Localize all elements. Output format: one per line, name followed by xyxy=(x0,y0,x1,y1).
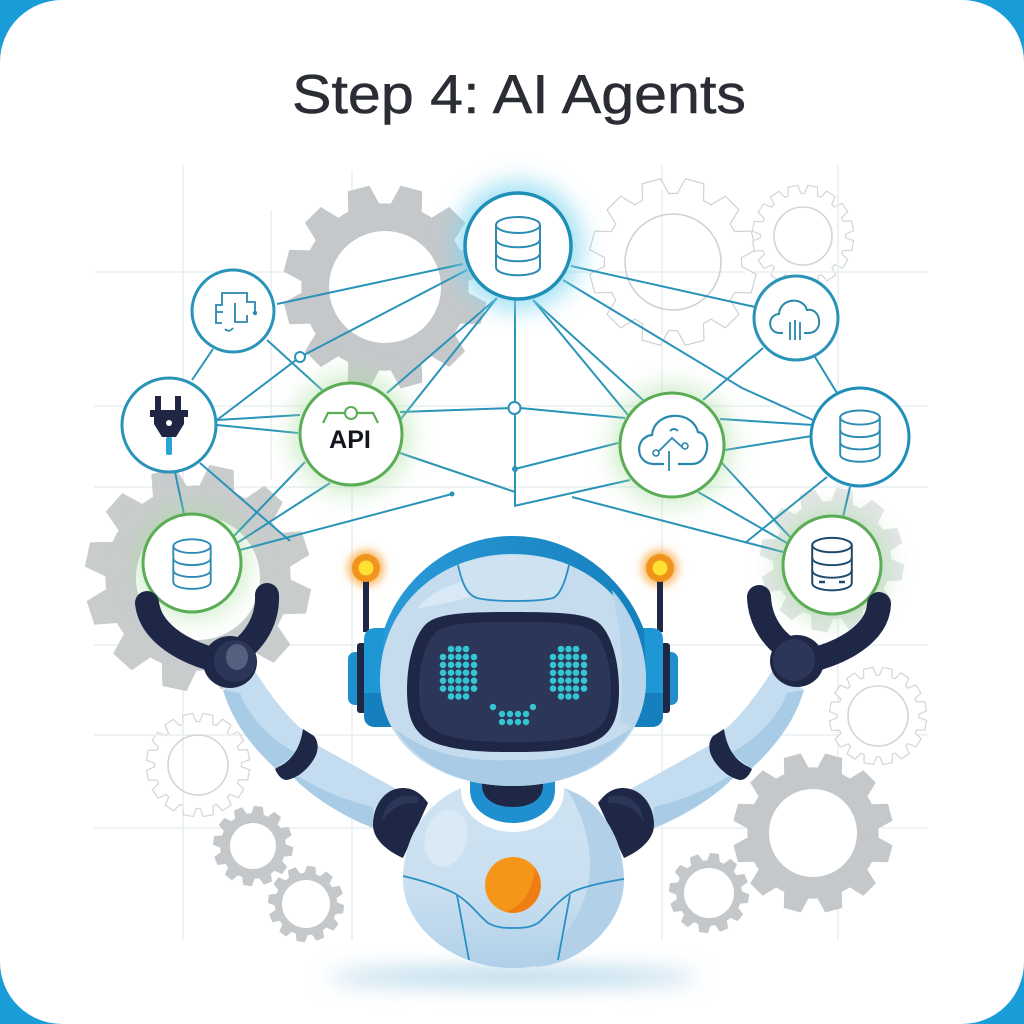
gear: outline top right large xyxy=(571,160,775,364)
network junctions xyxy=(295,352,520,496)
gear: outline right xyxy=(822,660,934,772)
left eye xyxy=(443,649,474,697)
body shading xyxy=(535,789,624,967)
node: plug icon xyxy=(122,378,216,472)
antennas xyxy=(349,551,677,632)
ground shadow xyxy=(328,969,698,985)
gear: outline top right small xyxy=(744,177,862,295)
head dome xyxy=(380,536,646,680)
node: right database green xyxy=(783,516,881,614)
body highlight xyxy=(419,805,473,871)
right arm xyxy=(629,668,804,828)
robot xyxy=(147,536,879,985)
chest light xyxy=(485,857,541,913)
right hand xyxy=(759,597,879,687)
gear: small grey left lower xyxy=(263,861,349,947)
chin shade xyxy=(396,728,632,786)
node: right database xyxy=(811,388,909,486)
smile xyxy=(493,707,533,722)
right eye xyxy=(553,649,584,697)
node glows xyxy=(136,182,888,621)
head panel xyxy=(458,555,569,601)
node: green cloud xyxy=(620,393,724,497)
gear: large grey top centre xyxy=(260,162,510,412)
network connection lines xyxy=(175,264,850,552)
head xyxy=(380,554,646,786)
face screen xyxy=(407,612,619,752)
collar xyxy=(461,778,564,832)
gear: outline left xyxy=(138,705,258,825)
node: API xyxy=(300,383,402,485)
title: Step 4: AI Agents xyxy=(292,63,746,125)
gear: large grey bottom right xyxy=(715,735,911,931)
node: API: API xyxy=(329,426,371,454)
background gears xyxy=(64,160,934,947)
node: top database xyxy=(465,193,571,299)
shoulders xyxy=(373,788,654,858)
gear: small grey left upper xyxy=(208,801,298,891)
node: left database green xyxy=(143,514,241,612)
left hand xyxy=(147,595,267,688)
left arm xyxy=(223,668,398,828)
node: top right cloud xyxy=(754,276,838,360)
body seams xyxy=(403,876,624,960)
head highlight xyxy=(418,573,507,608)
head right shade xyxy=(612,590,646,728)
gear: pale right xyxy=(749,477,915,643)
gear: large grey left xyxy=(64,444,332,712)
headphones xyxy=(348,628,678,727)
gear: small grey bottom right xyxy=(664,848,754,938)
body xyxy=(403,778,624,968)
node: circuit icon xyxy=(192,270,274,352)
